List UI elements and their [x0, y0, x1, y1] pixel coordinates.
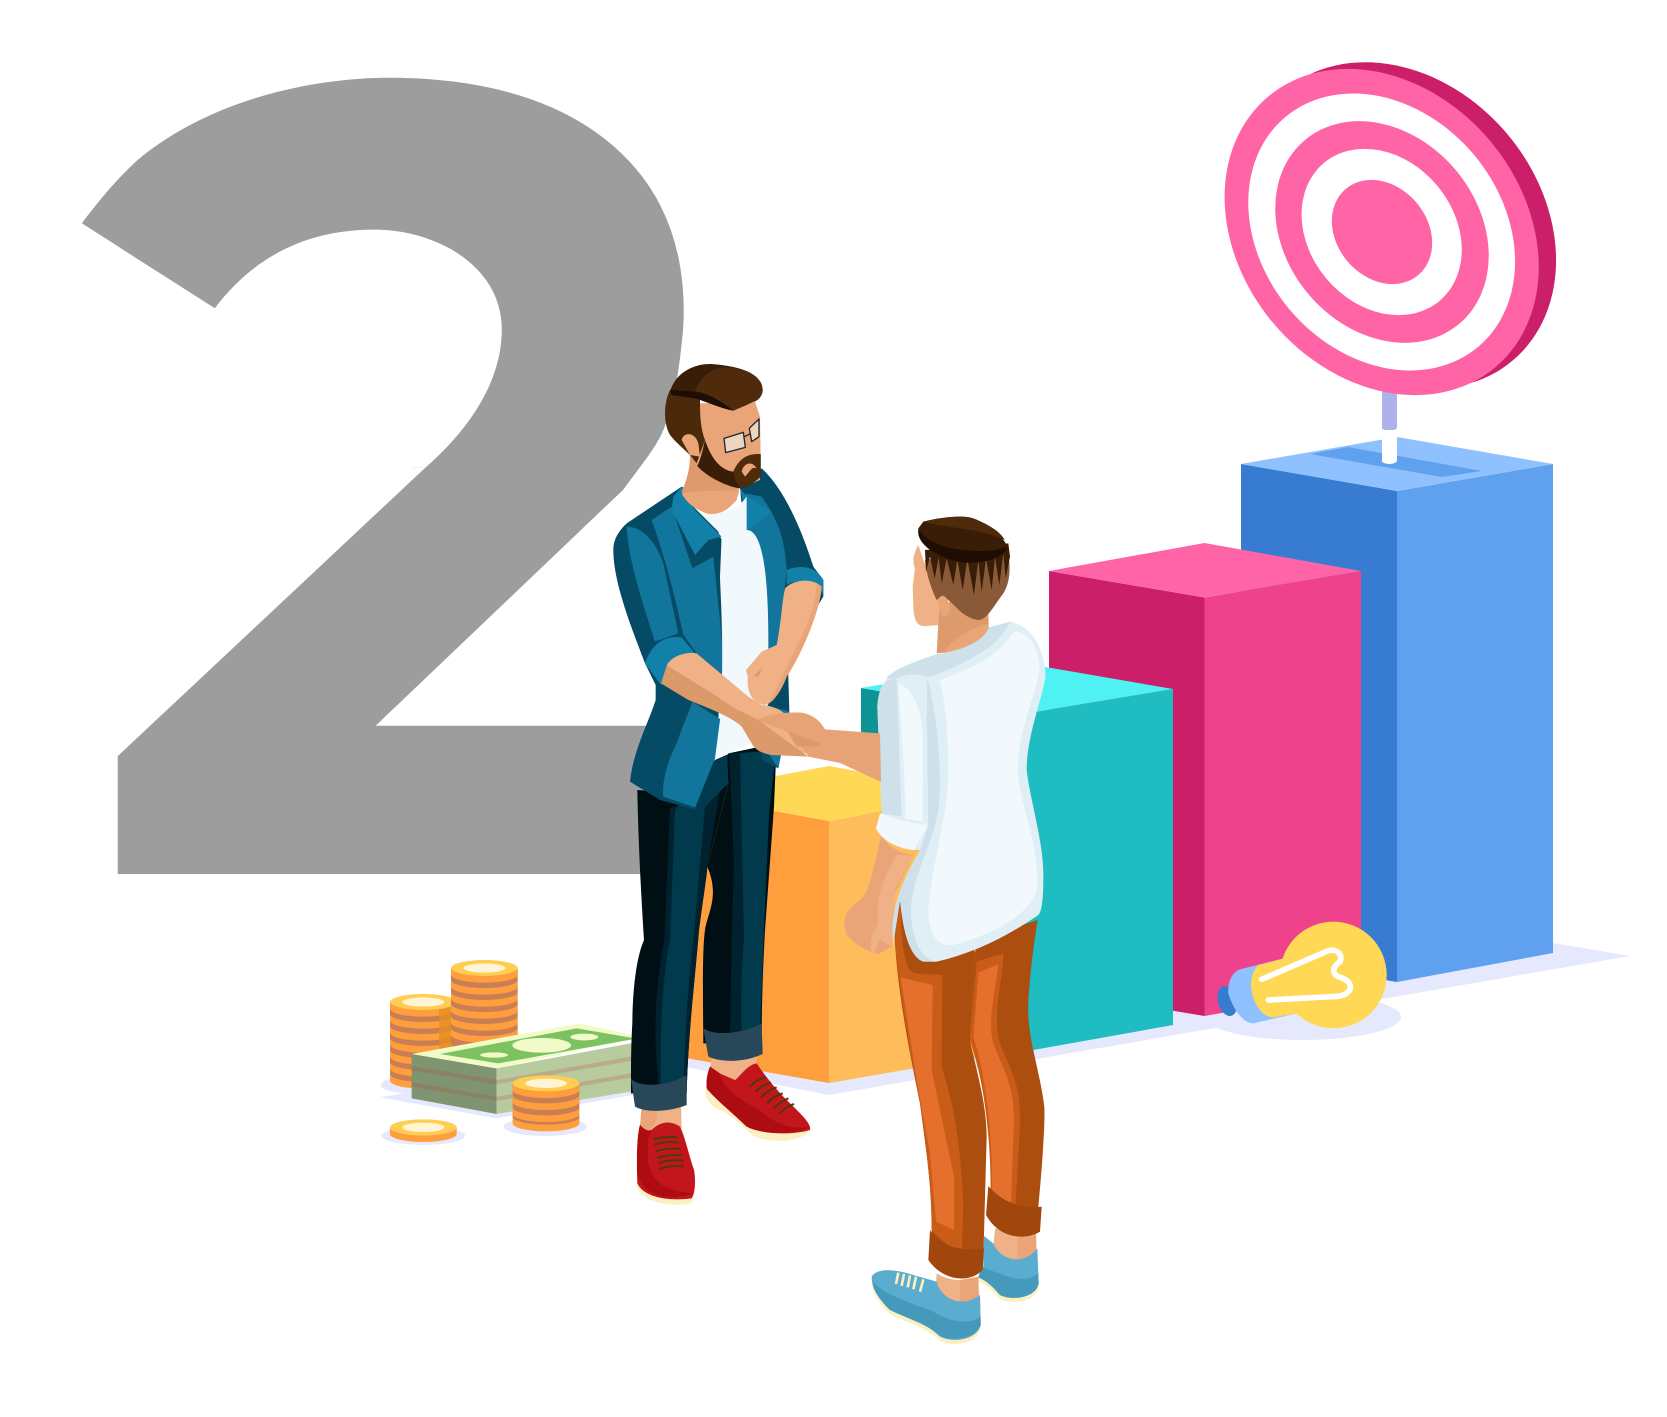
head with glasses and beard — [665, 364, 763, 514]
icon: light bulb — [1214, 922, 1387, 1028]
left trouser leg — [894, 900, 987, 1260]
orange trousers and blue shoes — [872, 900, 1044, 1344]
upper body — [844, 517, 1046, 962]
back of head — [925, 547, 1010, 620]
right trouser leg — [970, 920, 1044, 1220]
target on pole — [1160, 0, 1621, 464]
trouser cuffs — [631, 1075, 687, 1111]
shoe: right — [705, 1063, 811, 1141]
trousers and shoes — [631, 743, 811, 1205]
bar: blue tallest — [1241, 437, 1553, 982]
white shirt — [876, 622, 1046, 962]
neck — [937, 600, 989, 653]
man with beard and denim jacket — [613, 364, 823, 1205]
arms and hands — [661, 581, 822, 757]
right trouser leg — [703, 743, 777, 1043]
bar: teal — [861, 662, 1173, 1053]
hair — [925, 543, 1010, 595]
floor shadow under bars — [660, 943, 1630, 1095]
reaching arm and handshake — [757, 712, 881, 782]
shoe: back left — [636, 1123, 695, 1205]
coin stack: back — [451, 960, 518, 1051]
coin stack: left — [390, 994, 457, 1089]
face — [913, 545, 940, 626]
glasses — [724, 419, 759, 453]
shoe: front — [872, 1270, 981, 1344]
bar: orange — [680, 766, 980, 1083]
banknote bundle — [412, 1023, 640, 1114]
man seen from behind — [757, 517, 1046, 1344]
ankles — [640, 1105, 682, 1132]
bar: pink — [1049, 543, 1361, 1016]
trouser cuffs — [986, 1186, 1042, 1237]
coin stack: front — [513, 1075, 579, 1131]
left trouser leg — [631, 753, 730, 1093]
denim jacket and t-shirt — [613, 468, 823, 809]
arm below sleeve — [844, 835, 913, 954]
money: coins and banknotes — [380, 960, 640, 1145]
single coin — [390, 1119, 457, 1142]
shoe: back — [978, 1228, 1039, 1302]
